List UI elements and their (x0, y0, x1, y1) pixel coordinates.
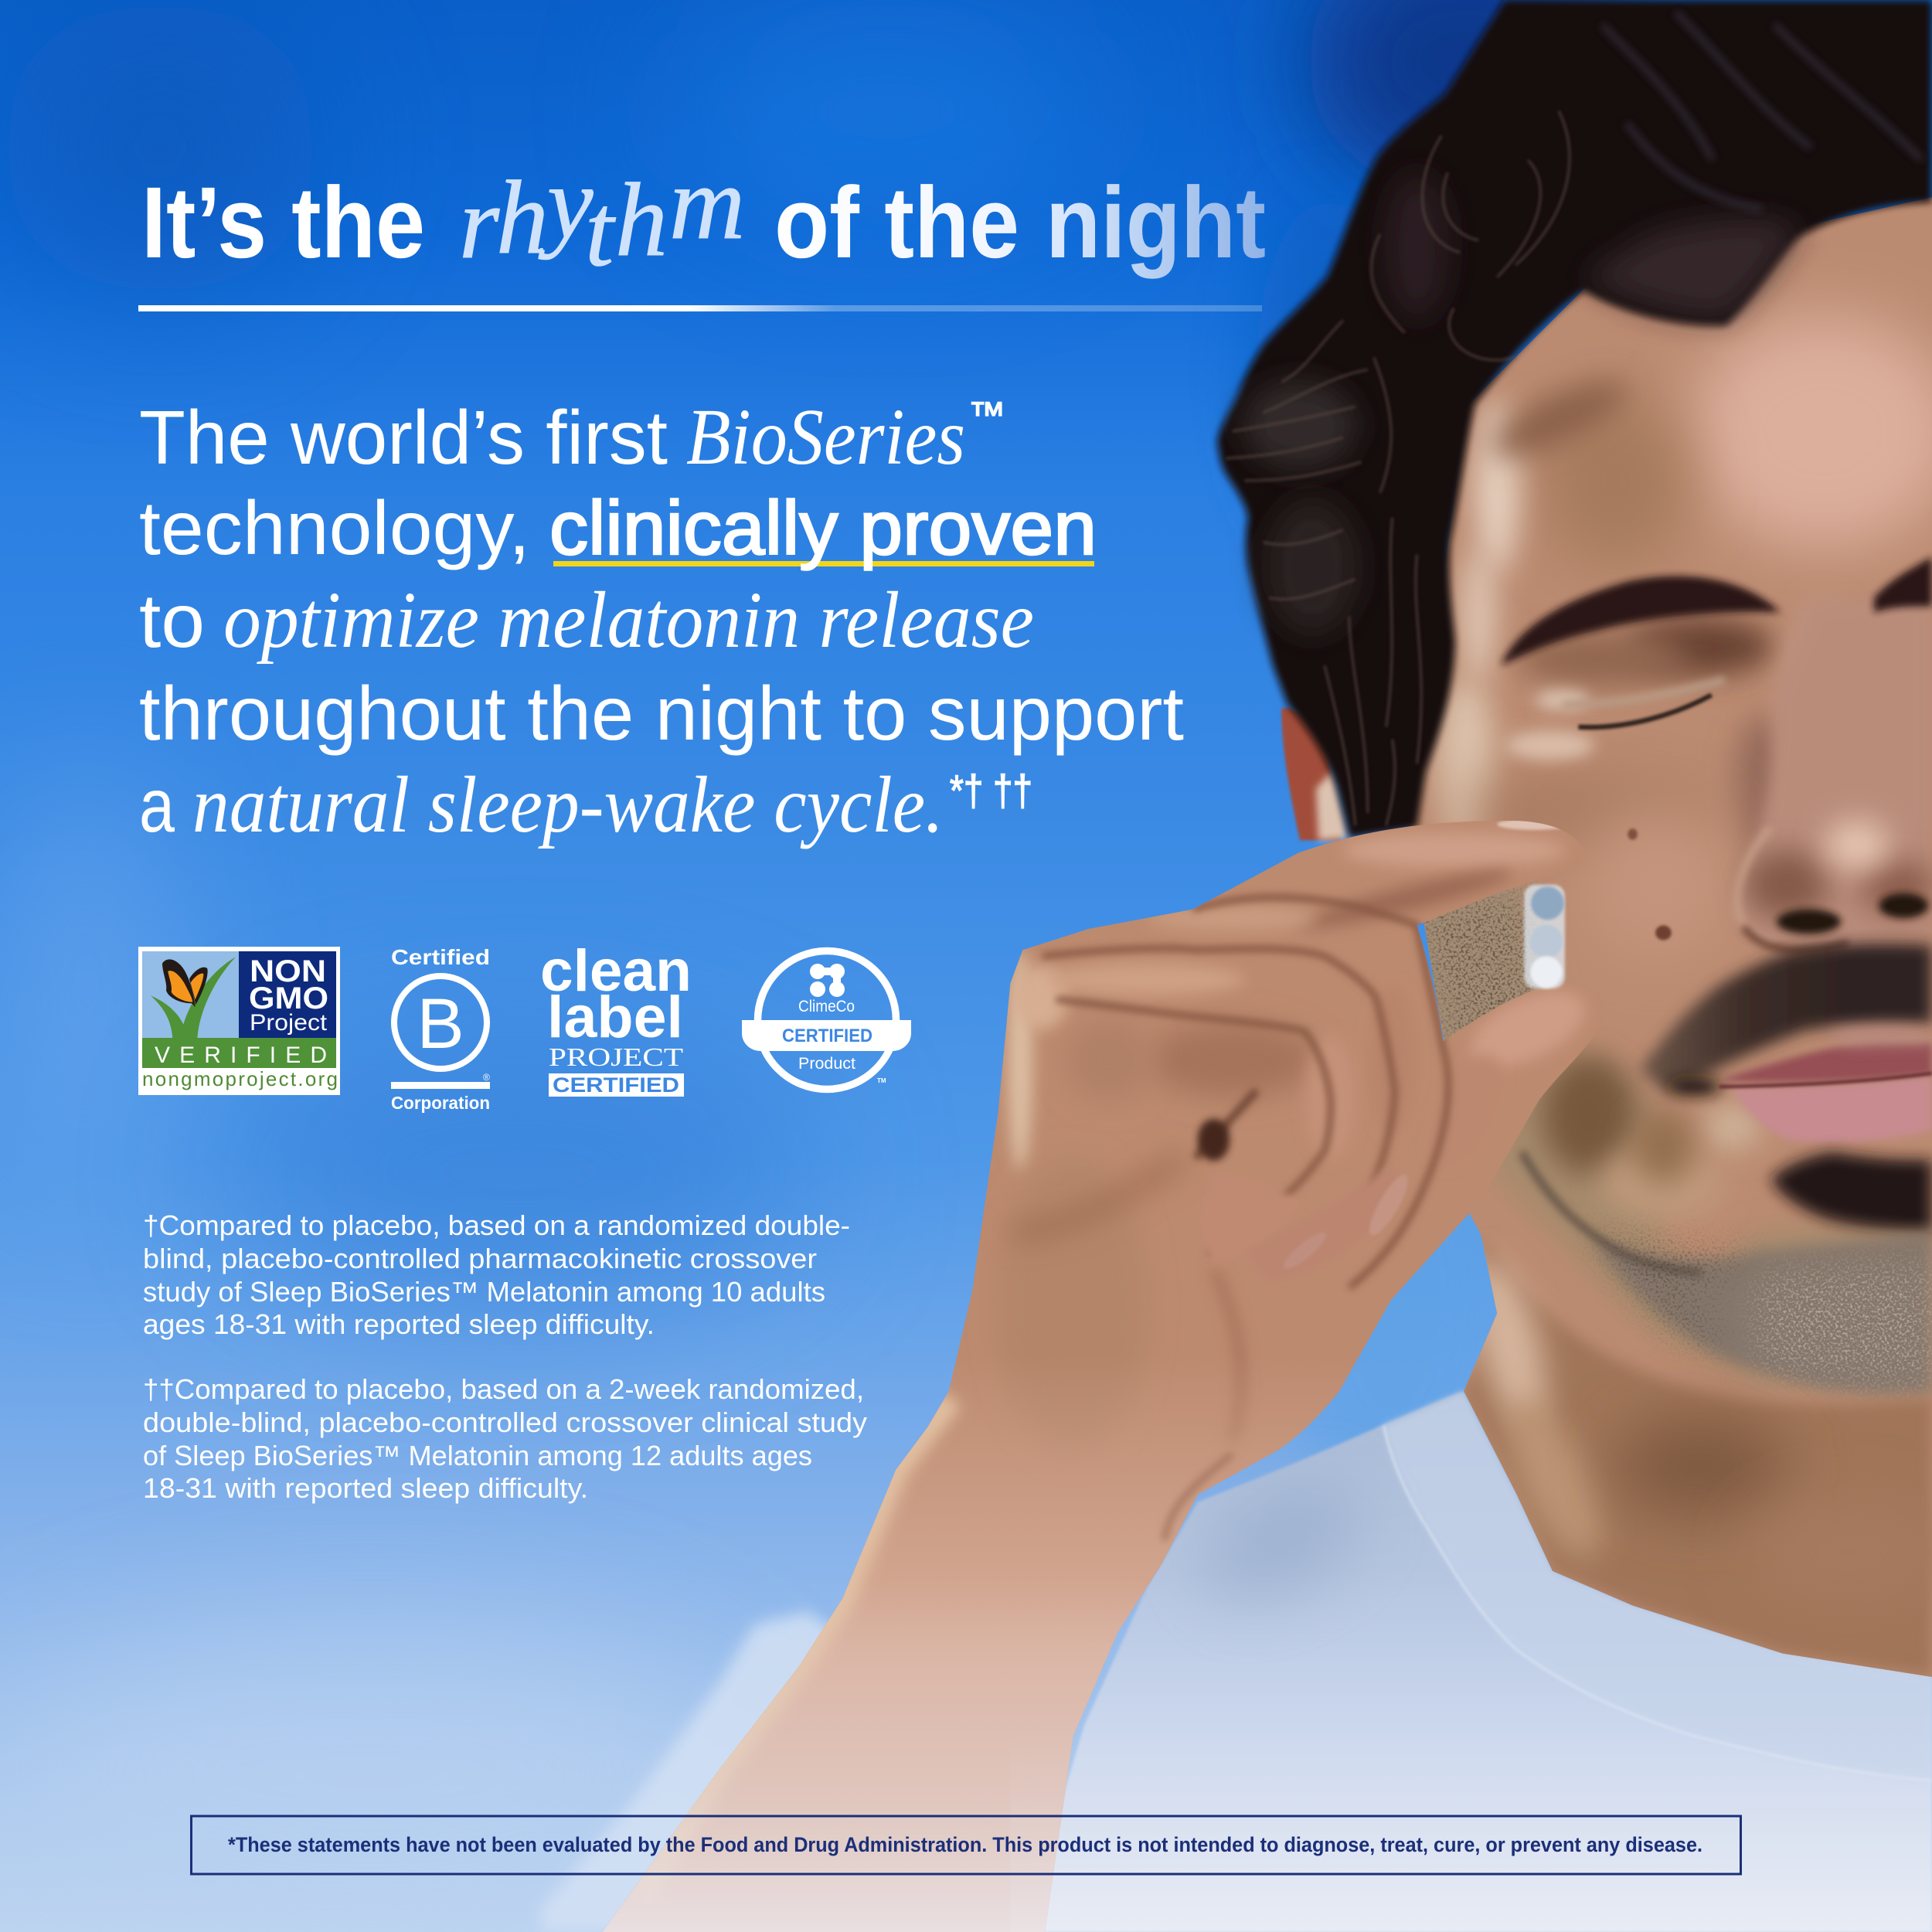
capsule in fingers (1524, 885, 1565, 988)
jaw stubble (1478, 1056, 1932, 1393)
badge: Non GMO Project: nongmoproject.org (142, 1067, 338, 1090)
badge: ClimeCo Certified Product (742, 951, 911, 1090)
footnote one (143, 1209, 850, 1340)
title (141, 145, 1266, 287)
badge: Certified B Corporation: Corporation (391, 1093, 490, 1113)
soft bottom fade (1010, 1725, 1932, 1932)
badge: Non GMO Project: NON (250, 954, 326, 988)
knuckle rim highlight (1008, 949, 1032, 1171)
badge: Clean Label Project: CERTIFIED (553, 1073, 679, 1097)
footnote one: study of Sleep BioSeries™ Melatonin among 10 adults (143, 1276, 825, 1308)
title word: rhythm: y (538, 145, 594, 260)
hair strands (1226, 111, 1570, 825)
badge: Clean Label Project: label (547, 985, 683, 1050)
brow shadow (1627, 617, 1774, 676)
title: of the (774, 165, 1019, 279)
eyebrow (1501, 576, 1781, 665)
main statement: throughout the night to support (139, 671, 1184, 756)
badge: ClimeCo Certified Product: CERTIFIED (782, 1026, 872, 1046)
badge: Non GMO Project: Project (250, 1010, 328, 1036)
badge: Clean Label Project: PROJECT (549, 1043, 683, 1072)
main statement: a (139, 763, 175, 848)
main statement: technology, (139, 485, 530, 570)
title: It’s the (141, 165, 425, 279)
badge: ClimeCo Certified Product: Product (798, 1055, 855, 1073)
icon: butterfly and grass (151, 957, 236, 1038)
badge: Clean Label Project (540, 938, 692, 1097)
badge: ClimeCo Certified Product: TM (877, 1077, 886, 1084)
badge: Certified B Corporation: Certified (391, 945, 490, 969)
grey beard (1590, 1232, 1932, 1394)
footnote two (143, 1373, 867, 1504)
forearm tones (530, 1355, 1639, 1932)
title word: rhythm: h (615, 162, 668, 278)
title word: rhythm: t (585, 173, 616, 287)
badge: Non GMO Project: GMO (249, 981, 328, 1015)
title word: rhythm: m (669, 145, 745, 261)
title word: rhythm (459, 145, 745, 287)
title rule (138, 305, 1262, 311)
main statement: BioSeries (686, 393, 965, 481)
badge: Clean Label Project: clean (540, 938, 692, 1004)
FDA disclaimer box (192, 1816, 1740, 1874)
finger creases (1043, 897, 1448, 1287)
main statement: *† †† (950, 766, 1032, 815)
badge: Certified B Corporation: ® (483, 1072, 490, 1083)
highlight: clinically proven: clinically proven (549, 485, 1097, 570)
footnote two: double-blind, placebo-controlled crossover clinical study (143, 1406, 867, 1438)
title word: rhythm: h (496, 160, 549, 276)
moustache (1640, 944, 1932, 1090)
nose (1736, 591, 1932, 951)
ear (1281, 708, 1349, 840)
main statement: natural sleep-wake cycle. (192, 760, 944, 849)
hair (1217, 0, 1932, 838)
main statement: ™ (968, 394, 1005, 434)
icon: ClimeCo molecule (810, 964, 845, 997)
neck (1464, 1235, 1932, 1677)
lips (1719, 1027, 1932, 1142)
badge: Non GMO Project: VERIFIED (155, 1043, 327, 1068)
face (1410, 197, 1932, 1677)
closed eye (1578, 695, 1712, 727)
goatee (1770, 1152, 1932, 1232)
FDA disclaimer box: *These statements have not been evaluated by the Food and Drug Administration. This product is not intended to diagnose, treat, cure, or prevent any disease. (228, 1833, 1702, 1856)
title: night (1046, 165, 1266, 279)
shirt (541, 1391, 1932, 1932)
footnote two: of Sleep BioSeries™ Melatonin among 12 adults ages (143, 1440, 812, 1471)
photo: man holding capsule (530, 0, 1932, 1932)
badge: Certified B Corporation: B (417, 985, 464, 1063)
stubble cheek (1393, 875, 1555, 1072)
footnote two: ††Compared to placebo, based on a 2-week randomized, (143, 1373, 864, 1405)
title word: rhythm: r (459, 165, 500, 280)
footnote one: †Compared to placebo, based on a randomized double- (143, 1209, 850, 1241)
footnotes (143, 1209, 867, 1504)
badge: Certified B Corporation (391, 945, 490, 1113)
footnote one: blind, placebo-controlled pharmacokinetic crossover (143, 1243, 817, 1274)
main statement: to (139, 578, 205, 663)
badge: ClimeCo Certified Product: ClimeCo (798, 998, 855, 1015)
main statement: The world’s first (139, 395, 668, 480)
badge: Non GMO Project (138, 947, 340, 1095)
footnote one: ages 18-31 with reported sleep difficulty. (143, 1308, 655, 1340)
main statement (139, 393, 1184, 849)
hand (530, 801, 1639, 1932)
main statement: optimize melatonin release (223, 576, 1034, 665)
footnote two: 18-31 with reported sleep difficulty. (143, 1472, 588, 1504)
